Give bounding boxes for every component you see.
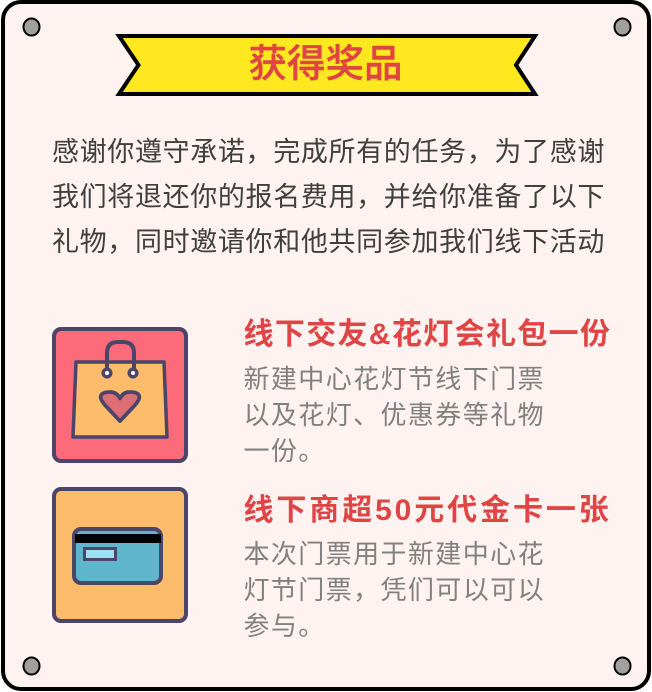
title: 获得奖品 xyxy=(248,43,403,86)
icon: rivet top left xyxy=(22,18,40,36)
intro text: 我们将退还你的报名费用，并给你准备了以下 xyxy=(52,182,605,212)
heading: gift pack: 线下交友&花灯会礼包一份 xyxy=(244,318,611,351)
intro text: 礼物，同时邀请你和他共同参加我们线下活动 xyxy=(52,226,605,256)
intro text xyxy=(52,136,605,256)
icon: rivet bottom right xyxy=(614,656,632,676)
description: gift pack: 一份。 xyxy=(244,436,326,466)
description: voucher card: 本次门票用于新建中心花 xyxy=(244,539,545,569)
icon: rivet bottom left xyxy=(22,656,40,676)
description: voucher card: 灯节门票，凭们可以可以 xyxy=(244,575,545,605)
heading: voucher card: 线下商超50元代金卡一张 xyxy=(244,494,612,527)
title ribbon xyxy=(115,34,539,96)
description: gift pack: 新建中心花灯节线下门票 xyxy=(244,364,545,394)
icon: gift bag xyxy=(52,327,188,463)
icon: bank card xyxy=(52,487,188,623)
description: gift pack xyxy=(244,364,545,466)
description: voucher card xyxy=(244,539,545,641)
icon: rivet top right xyxy=(614,18,632,36)
description: gift pack: 以及花灯、优惠券等礼物 xyxy=(244,400,545,430)
description: voucher card: 参与。 xyxy=(244,611,326,641)
intro text: 感谢你遵守承诺，完成所有的任务，为了感谢 xyxy=(52,136,605,166)
